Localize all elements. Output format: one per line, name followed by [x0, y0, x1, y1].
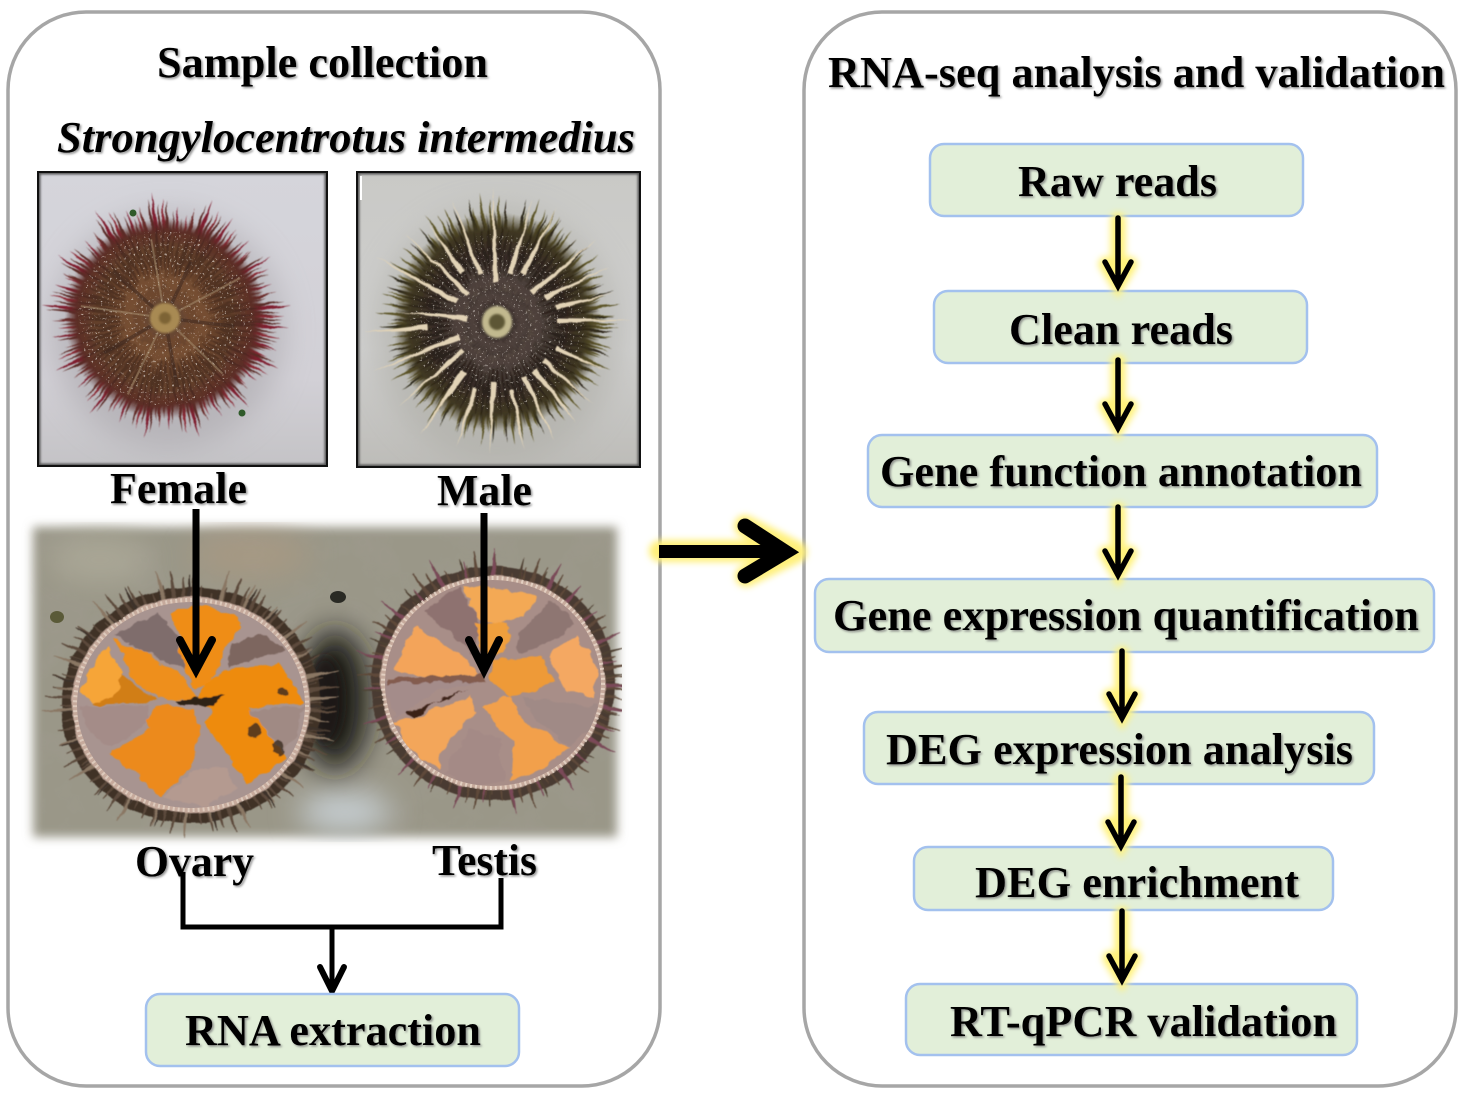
heading: species name: Strongylocentrotus intermedius	[57, 113, 635, 162]
box: RT-qPCR validation: RT-qPCR validation	[950, 997, 1337, 1046]
box: RT-qPCR validation	[906, 984, 1357, 1055]
box: gene expression quantification	[815, 579, 1434, 652]
box: DEG expression analysis: DEG expression analysis	[886, 725, 1353, 774]
arrow: quantification to DEG expression	[1109, 651, 1135, 718]
box: clean reads: Clean reads	[1009, 305, 1233, 354]
arrow: clean to annotation	[1105, 360, 1131, 428]
box: gene expression quantification: Gene expression quantification	[833, 591, 1419, 640]
arrow: annotation to quantification	[1105, 507, 1131, 575]
arrow: enrichment to RT-qPCR	[1109, 911, 1135, 980]
testis urchin	[356, 548, 622, 814]
box: clean reads	[934, 291, 1307, 363]
box: raw reads	[930, 144, 1303, 216]
box: RNA extraction: RNA extraction	[185, 1006, 481, 1055]
label: male: Male	[437, 466, 532, 515]
label: testis: Testis	[432, 836, 537, 885]
arrow: DEG expression to enrichment	[1108, 777, 1134, 846]
box: raw reads: Raw reads	[1018, 157, 1217, 206]
heading: sample collection: Sample collection	[157, 38, 488, 87]
label: female: Female	[110, 464, 247, 513]
box: DEG expression analysis	[864, 712, 1374, 784]
box: DEG enrichment	[914, 847, 1333, 910]
photo: male sea urchin	[357, 172, 640, 467]
box: RNA extraction	[146, 994, 519, 1066]
connector: ovary and testis to RNA extraction	[183, 872, 501, 991]
box: gene function annotation: Gene function annotation	[880, 447, 1362, 496]
photo: dissected ovary and testis	[29, 527, 655, 852]
arrow: raw to clean	[1105, 218, 1131, 286]
label: ovary: Ovary	[135, 837, 254, 886]
box: DEG enrichment: DEG enrichment	[975, 858, 1299, 907]
panel: RNA-seq analysis and validation	[804, 12, 1456, 1086]
box: gene function annotation	[868, 435, 1377, 507]
photo: female sea urchin	[34, 172, 327, 466]
arrow: male to testis	[469, 513, 499, 670]
arrow: sample collection to RNA-seq analysis	[659, 526, 796, 576]
panel: sample collection	[8, 12, 660, 1086]
arrow: female to ovary	[180, 509, 212, 670]
heading: RNA-seq analysis and validation: RNA-seq analysis and validation	[828, 48, 1445, 97]
ovary urchin	[42, 570, 340, 838]
